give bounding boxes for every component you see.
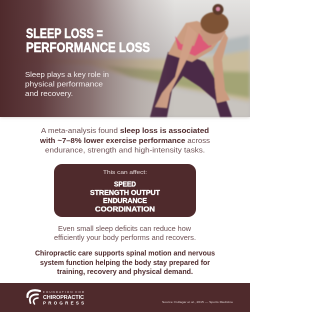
meta-analysis text: A meta-analysis found sleep loss is associated bbox=[41, 128, 209, 135]
torso bbox=[168, 21, 225, 62]
panel: footer bbox=[0, 283, 250, 312]
sleep deficit text: efficiently your body performs and recovers. bbox=[54, 235, 196, 242]
photo: athlete bending over bbox=[150, 4, 232, 117]
list of affected abilities: ENDURANCE bbox=[103, 196, 147, 205]
face bbox=[200, 30, 226, 46]
panel: this can affect bbox=[54, 164, 196, 217]
right arm bbox=[213, 33, 230, 103]
chiropractic care text: system function helping the body stay prepared for bbox=[40, 260, 210, 267]
hair bbox=[200, 12, 228, 34]
sleep deficit text: Even small sleep deficits can reduce how bbox=[58, 226, 192, 233]
meta-analysis text bbox=[39, 128, 211, 154]
meta-analysis text: with ~7–8% lower exercise performance across bbox=[39, 138, 211, 145]
pink top bbox=[175, 33, 212, 56]
left arm bbox=[155, 25, 197, 108]
chiropractic care text: Chiropractic care supports spinal motion and nervous bbox=[35, 250, 215, 258]
gradient overlay bbox=[0, 0, 250, 117]
list of affected abilities: STRENGTH OUTPUT bbox=[90, 188, 160, 197]
leggings bbox=[150, 52, 232, 117]
list of affected abilities: COORDINATION bbox=[95, 204, 155, 214]
source citation: Source: Fullagar et al., 2015 — Sports Medicine bbox=[162, 300, 233, 304]
list of affected abilities: SPEED bbox=[114, 180, 137, 188]
meta-analysis text: endurance, strength and high-intensity tasks. bbox=[45, 148, 205, 154]
intro text bbox=[25, 72, 109, 98]
intro text: Sleep plays a key role in bbox=[25, 72, 109, 79]
title bbox=[26, 26, 150, 55]
chiropractic care text bbox=[35, 250, 215, 276]
title: SLEEP LOSS = bbox=[26, 26, 103, 41]
icon: logo mark bbox=[27, 290, 40, 304]
logo wordmark: PROGRESS bbox=[43, 300, 84, 306]
title: PERFORMANCE LOSS bbox=[26, 40, 150, 55]
chiropractic care text: training, recovery and physical demand. bbox=[57, 269, 193, 276]
scenery bbox=[0, 35, 250, 117]
logo wordmark bbox=[43, 290, 84, 306]
logo wordmark: CHIROPRACTIC bbox=[43, 295, 84, 301]
panel: hero photo bbox=[0, 0, 250, 117]
infographic bbox=[0, 0, 250, 312]
sleep deficit text bbox=[54, 226, 196, 242]
panel label: This can affect: bbox=[103, 170, 147, 176]
logo wordmark: FOUNDATION FOR bbox=[43, 290, 84, 294]
list of affected abilities bbox=[90, 180, 160, 214]
intro text: and recovery. bbox=[25, 91, 73, 98]
intro text: physical performance bbox=[25, 82, 103, 88]
